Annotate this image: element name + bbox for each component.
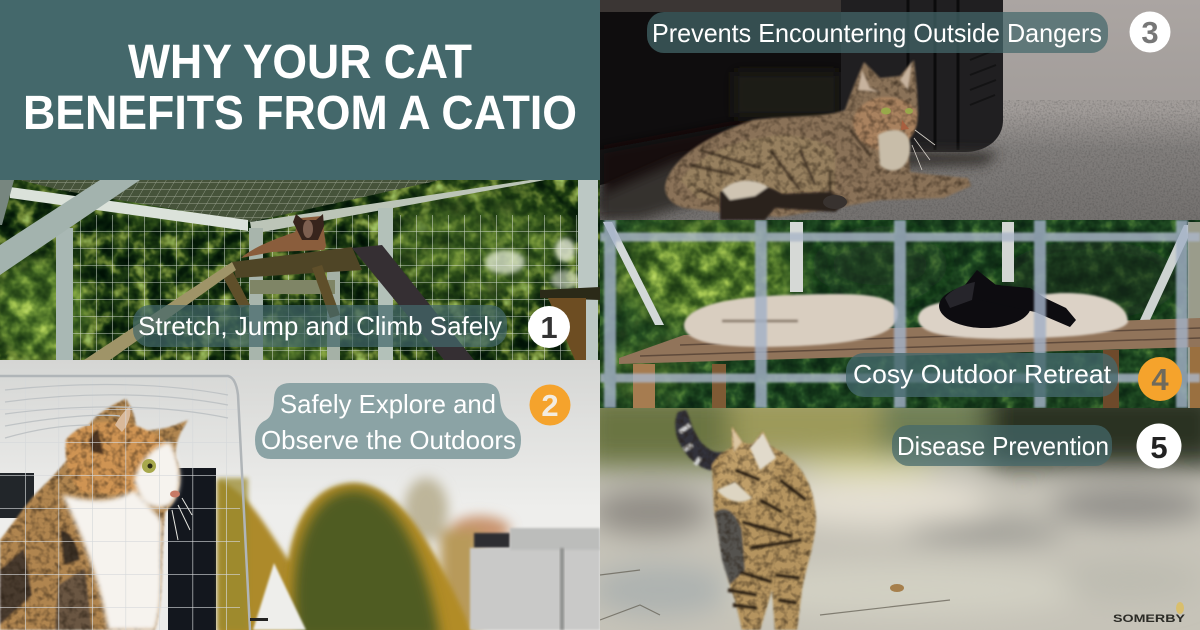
cushions [684, 293, 1128, 347]
blurred foreground wire [600, 220, 1200, 408]
dark panel behind cage [0, 468, 248, 630]
badge 5 [1136, 424, 1182, 468]
heading: title [23, 36, 577, 140]
badge 4 [1138, 357, 1182, 401]
badge 2: 2 [541, 388, 559, 423]
label 2 [255, 383, 521, 459]
panel: outside dangers [600, 0, 1200, 220]
label 4 [846, 353, 1118, 397]
label 1: Stretch, Jump and Climb Safely [138, 311, 502, 341]
panel: disease prevention [600, 408, 1200, 630]
cat face details [142, 459, 192, 540]
badge 5: 5 [1150, 430, 1168, 465]
label 2: Observe the Outdoors [261, 425, 516, 455]
label 4: Cosy Outdoor Retreat [853, 359, 1112, 389]
label 1 [133, 305, 507, 347]
badge 4: 4 [1151, 362, 1169, 397]
background trees and building [218, 478, 600, 630]
panel: cosy outdoor retreat [600, 220, 1200, 408]
badge 1: 1 [540, 310, 558, 345]
heading: title: WHY YOUR CAT [128, 36, 472, 89]
climbing platform and ramps [84, 245, 600, 360]
wooden table [619, 318, 1200, 408]
label 3: Prevents Encountering Outside Dangers [652, 18, 1102, 48]
logo [1114, 602, 1185, 622]
black cat [939, 270, 1076, 328]
cat face and paws [823, 108, 935, 209]
label 5 [892, 425, 1112, 466]
panel: stretch, jump and climb [0, 180, 600, 360]
cat behind wire [0, 399, 188, 630]
badge 3: 3 [1141, 15, 1159, 50]
logo: SOMERBY [1113, 613, 1186, 625]
tabby cat under car [665, 60, 971, 220]
badge 1 [528, 306, 570, 348]
walking tabby cat [675, 410, 816, 630]
panel: title [0, 0, 600, 180]
frame behind [603, 222, 1200, 408]
car underside and tyre [600, 0, 1003, 220]
label 2: Safely Explore and [280, 389, 496, 419]
badge 3 [1130, 12, 1170, 52]
cat on platform [241, 214, 326, 258]
catio frame [0, 180, 598, 360]
label 5: Disease Prevention [897, 431, 1109, 461]
panel: safely explore [0, 360, 600, 630]
badge 2 [530, 384, 570, 426]
heading: title: BENEFITS FROM A CATIO [23, 87, 577, 140]
wire cage [0, 376, 268, 630]
